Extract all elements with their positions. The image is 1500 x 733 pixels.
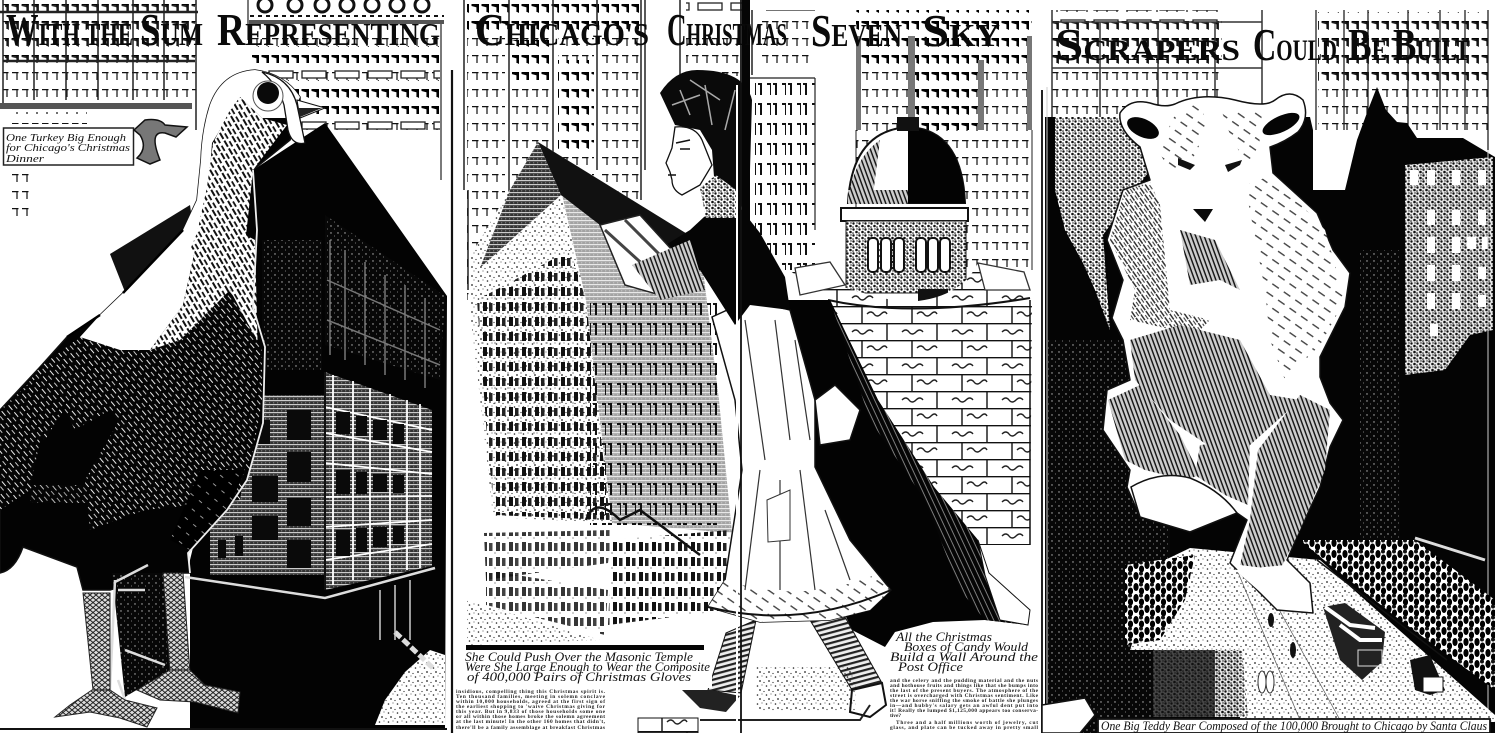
icon: bear caption ribbon: [1042, 698, 1095, 733]
title: With the Sum Representing: REPRESENTING: [217, 4, 440, 55]
article text: right column: Three and a half millions worth of jewelry, cut: [896, 720, 1038, 726]
caption: candy boxes: Post Office: [897, 660, 964, 674]
girl: bodice and sleeve: [600, 200, 790, 325]
callout: one turkey big enough: Dinner: [5, 153, 45, 165]
wall of candy boxes: [789, 262, 1032, 545]
article text: right column: in—and hubby's salary gets an awful dent put into: [890, 703, 1038, 709]
article text: right column: the war horse sniffing the smoke of battle she plunges: [890, 698, 1038, 704]
article text: left column: [456, 689, 606, 731]
turkey legs and feet: [55, 565, 240, 727]
windows: right skyscraper block: [750, 10, 1032, 270]
article text: left column: insidious, compelling thing this Christmas spirit is.: [456, 689, 606, 695]
title: Scrapers Could Be Built: [1055, 19, 1470, 70]
article text: left column: at the last minute! In the other 160 homes that didn't,: [456, 719, 606, 725]
caption: candy boxes: Boxes of Candy Would: [904, 640, 1029, 654]
article text: left column: Ten thousand families, meeting in solemn conclave: [456, 694, 606, 700]
article text: left column: within 10,000 households, agreed at the first sign of: [456, 699, 605, 705]
caption: Masonic Temple: Were She Large Enough to Wear the Composite: [465, 660, 710, 674]
panel divider: [451, 70, 453, 733]
girl: head, face and hair: [660, 70, 752, 218]
title: Scrapers Could Be Built: COULD: [1253, 19, 1337, 70]
callout: one turkey big enough: for Chicago's Christmas: [6, 142, 130, 154]
caption: Masonic Temple: of 400,000 Pairs of Christmas Gloves: [467, 670, 691, 684]
dark city buildings: [1041, 87, 1495, 733]
article text: left column: the earliest shopping to 'waive Christmas giving for: [456, 704, 606, 710]
trolley car: [1323, 603, 1385, 680]
windows: upper left building: [0, 0, 198, 218]
title: Scrapers Could Be Built: BE: [1348, 19, 1387, 70]
article text: right column: [890, 678, 1039, 731]
article text: left column: this year. But in 9,833 of those households some one: [456, 709, 606, 715]
article text: right column: the last of the present buyers. The atmosphere of the: [890, 688, 1039, 694]
distant city sketch: [756, 667, 856, 711]
title: Scrapers Could Be Built: SCRAPERS: [1055, 19, 1240, 70]
teddy bear body: [1103, 94, 1350, 613]
girl: leg and shoes: [682, 617, 886, 717]
callout: one turkey big enough: [4, 128, 134, 165]
article text: right column: street is overcharged with Christmas sentiment. Like: [890, 693, 1039, 699]
caption: candy boxes: Build a Wall Around the: [890, 650, 1039, 664]
article text: right column: it! Really the lumped $1,125,000 appears too conserva-: [890, 707, 1038, 714]
windows: upper skyscrapers: [1052, 10, 1488, 150]
vertical page fold: [736, 0, 1040, 733]
article text: right column: glass, and plate can be tucked away in pretty small: [890, 725, 1038, 731]
caption: Masonic Temple: She Could Push Over the Masonic Temple: [465, 650, 693, 664]
Masonic Temple building: [466, 142, 732, 650]
horse carriage: [1410, 655, 1445, 695]
caption: candy boxes: All the Christmas: [895, 630, 992, 644]
distant building and bridge: [638, 705, 870, 733]
panel: turkey and skyscraper: [0, 0, 452, 733]
girl: cape: [785, 300, 1030, 647]
title: Scrapers Could Be Built: BUILT: [1393, 19, 1470, 70]
article text: right column: and hothouse fruits and things like that she bumps into: [890, 683, 1038, 689]
city street with crowd: [1125, 540, 1495, 722]
title: Chicago's Christmas Seven Sky: [475, 4, 1000, 56]
windows: background skyscraper columns: [464, 0, 752, 300]
girl: dress: [708, 300, 891, 622]
article text: right column: and the celery and the pudding material and the nuts: [890, 678, 1038, 684]
title: Chicago's Christmas Seven Sky: SEVEN: [811, 5, 902, 56]
title: Chicago's Christmas Seven Sky: SKY: [922, 5, 1000, 56]
title: Chicago's Christmas Seven Sky: CHICAGO'S: [475, 4, 649, 55]
panel: girl, Masonic Temple and candy wall: [456, 0, 1040, 733]
article text: left column: or all within those homes broke the solemn agreement: [456, 714, 605, 720]
turkey body: [0, 70, 325, 590]
article text: right column: tive?: [890, 713, 901, 719]
panel: teddy bear over city street: [1041, 10, 1495, 733]
post office dome: [841, 117, 968, 301]
caption: Masonic Temple: [460, 650, 712, 688]
title: With the Sum Representing: [6, 4, 440, 55]
windows: upper right building with medallions: [248, 0, 444, 180]
title: With the Sum Representing: SUM: [140, 4, 203, 55]
icon: scroll ribbon: [134, 120, 187, 164]
skyscraper behind turkey: [110, 123, 447, 728]
article text: left column: there'll be a family assemblage at breakfast Christmas: [456, 725, 605, 731]
caption: candy boxes: [890, 630, 1039, 674]
callout: one turkey big enough: One Turkey Big Enough: [6, 132, 127, 144]
title: Chicago's Christmas Seven Sky: CHRISTMAS: [667, 4, 787, 55]
title: With the Sum Representing: WITH THE: [6, 4, 133, 55]
